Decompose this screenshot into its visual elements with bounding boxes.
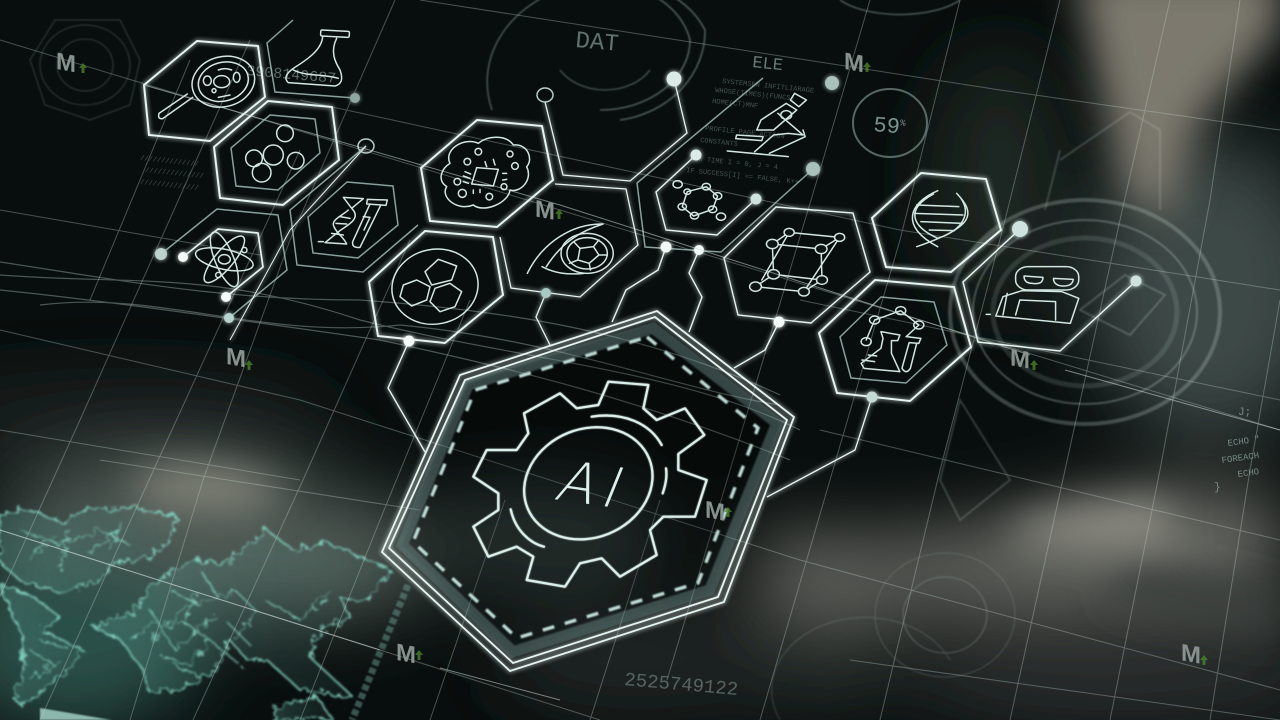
dim frame: flask hex inner	[840, 297, 947, 383]
dim line: atom outer frame	[161, 209, 287, 318]
connector: centre right	[689, 250, 702, 332]
watermark: M	[56, 48, 76, 78]
hud code: right: J;	[1238, 407, 1251, 419]
connector: brain ring to top dot	[545, 79, 687, 181]
hexagon: outer outline	[382, 311, 794, 671]
hexagon: brain	[421, 120, 553, 227]
hud rings: lower right	[772, 400, 1015, 720]
connector: ring to test tube frame	[230, 146, 366, 340]
world map	[0, 507, 390, 720]
hud code text: SYSTEMSEN INFITLIARAGE	[722, 78, 814, 96]
dotted teal strip	[352, 585, 408, 720]
hexagon: robot	[963, 229, 1136, 351]
hexagon: dna	[872, 173, 1001, 272]
icon: atom	[194, 229, 255, 290]
watermark: M	[396, 639, 416, 669]
dim frame: test tube outer	[290, 146, 418, 272]
hud label: DAT: DAT	[574, 28, 620, 59]
hexagon: molecule	[656, 155, 756, 235]
node dots	[155, 72, 1142, 402]
icon: dna and test tube	[318, 197, 387, 247]
hud code text: HOME(CT)MNF	[712, 98, 758, 111]
icon: cells	[246, 125, 304, 182]
icon: robot	[986, 267, 1079, 323]
hexagon: atom	[183, 229, 263, 297]
node rings	[358, 88, 553, 153]
watermark: M	[844, 48, 864, 78]
hud gauge: 59 percent: %	[900, 118, 907, 129]
gear inner ring	[507, 408, 670, 558]
hud code text: FOR TIME I = 0, J = 4	[690, 155, 778, 172]
gear arc: right	[663, 468, 666, 493]
hexagon: translucent band	[402, 328, 777, 652]
hexagon: honeycomb	[369, 231, 503, 343]
icon: flask with molecule and tube	[861, 307, 924, 372]
hud code text: //////////////	[140, 179, 199, 193]
hud: top concentric arcs	[487, 0, 960, 120]
hud code: right	[1214, 407, 1261, 494]
hud code text: PROFILE PAGE ACTION	[705, 125, 785, 141]
icon: molecule	[673, 181, 726, 220]
central AI gear hexagon	[382, 311, 794, 671]
hud code text: WHOSE(TIMES)(FUNCS)	[715, 87, 795, 103]
hud radar: top left	[30, 20, 140, 120]
map highlight strip	[40, 708, 112, 720]
hexagon: flask	[819, 280, 971, 401]
watermark: M	[226, 343, 246, 373]
hud code: right: ECHO "	[1227, 435, 1261, 449]
connector: centre left	[612, 247, 666, 322]
hexagon: magnifier	[144, 41, 265, 141]
hud gauge: 59 percent	[853, 89, 927, 157]
connector: honeycomb to gear	[388, 341, 425, 452]
hud radar: right concentric rings	[950, 112, 1220, 424]
dim hexagon: molecule outer	[637, 78, 813, 252]
hexagon: dashed outline	[413, 337, 758, 638]
hud code text: CONSTANTS	[700, 137, 738, 149]
watermark	[56, 48, 87, 78]
icon: brain chip	[441, 137, 530, 208]
dim hexagon: test tube	[308, 182, 398, 258]
icon: dna helix	[912, 191, 968, 247]
hud number: upper left: 3908149687	[246, 63, 337, 88]
hud code: right: }	[1214, 482, 1221, 494]
connector: cube to gear	[734, 322, 779, 368]
connector: flask to gear	[767, 397, 872, 497]
hud label: ELE: ELE	[751, 54, 784, 76]
icon: gear	[473, 382, 707, 587]
icon: honeycomb circle	[385, 241, 485, 332]
icon: eye with cell	[527, 224, 613, 274]
hud code text: //////////////	[140, 155, 199, 169]
icon: flask	[286, 30, 349, 86]
watermark marks	[56, 48, 1208, 670]
hud code: right: FOREACH	[1221, 451, 1260, 466]
icons, right cluster	[527, 93, 1079, 372]
icon: microscope	[727, 93, 806, 157]
connector: eye to gear	[536, 293, 550, 345]
hexagon: second outline	[389, 317, 787, 663]
hexagon: eye	[500, 184, 638, 297]
watermark: M	[535, 195, 555, 226]
wave strands	[0, 262, 800, 460]
hud code: right: ECHO	[1237, 467, 1260, 480]
label: AI: AI	[548, 450, 641, 522]
watermark: M	[1010, 344, 1030, 375]
hud code text	[140, 78, 814, 193]
icons, top-left cluster	[159, 30, 530, 332]
hud code text: IF SUCCESS[I] == FALSE, K++	[686, 167, 799, 187]
gear arc: lower left	[511, 509, 544, 547]
network connectors and small hexagons	[144, 41, 1136, 497]
watermark: M	[1181, 639, 1201, 670]
watermark: M	[705, 496, 725, 527]
dim hexagon outlines	[161, 20, 947, 383]
icon: magnifier with cell	[159, 49, 260, 119]
dim frame: hex 2 inner	[231, 115, 320, 190]
hud number: 2525749122	[623, 669, 739, 701]
icon: cube	[750, 228, 845, 296]
hud code text: //////////////	[145, 167, 204, 181]
hud gauge: 59 percent: 59	[872, 113, 901, 140]
gear arc: upper right	[592, 416, 662, 445]
hexagon: cube	[724, 207, 870, 323]
hexagon: cells	[214, 101, 339, 205]
dim hexagon: flask frame	[267, 20, 355, 98]
